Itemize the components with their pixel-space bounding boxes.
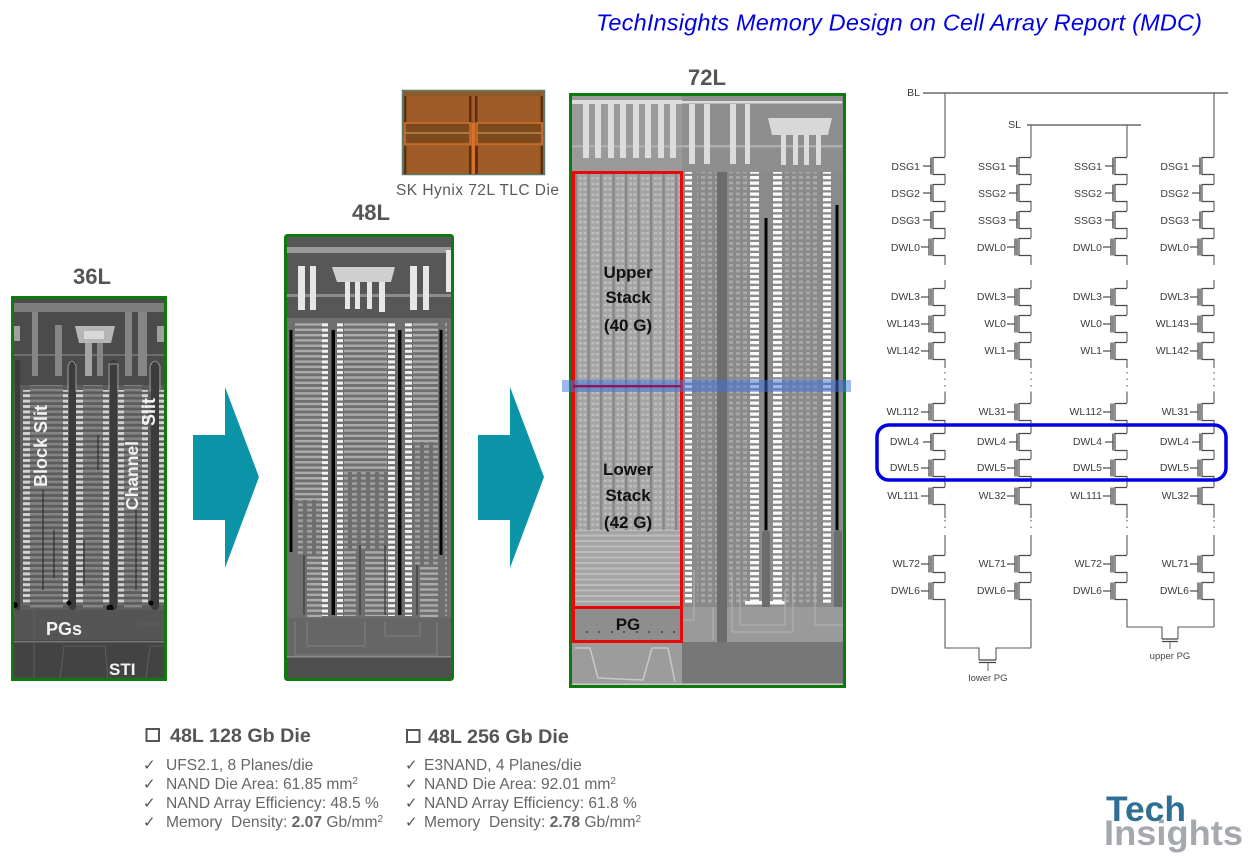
label: Upper Stack: Upper (603, 263, 653, 282)
SL line: SL (1008, 119, 1021, 131)
string 1: DSG3 (891, 215, 920, 227)
blue highlight box (877, 425, 1226, 480)
string 4: DWL6 (1160, 585, 1189, 597)
text block: 48L 256 Gb Die: NAND Array Efficiency: 61.8 % (424, 795, 637, 812)
string 3: SSG1 (1074, 161, 1102, 173)
string 1: WL142 (887, 345, 920, 357)
panel: 36L cross-section (12, 297, 166, 680)
BL line: BL (907, 87, 920, 99)
string 3: WL111 (1070, 490, 1102, 502)
text block: 48L 128 Gb Die: 2 (352, 776, 358, 787)
red box: stack (574, 172, 682, 608)
heading: 48L: 48L (352, 200, 390, 225)
die caption: SK Hynix 72L TLC Die (396, 182, 559, 199)
string 4: DWL3 (1160, 291, 1189, 303)
arrow: 36L to 48L (193, 387, 259, 568)
label: STI: STI (109, 660, 135, 679)
label: Lower Stack: Lower (603, 460, 653, 479)
string 1: WL111 (887, 490, 919, 502)
label: PG: PG (616, 615, 640, 634)
text block: 48L 256 Gb Die: 48L 256 Gb Die (428, 726, 569, 748)
string 2: DWL5 (977, 462, 1006, 474)
string 4: DWL4 (1160, 436, 1189, 448)
label: Upper Stack: Stack (605, 288, 651, 307)
string 2: SSG1 (978, 161, 1006, 173)
string 4: WL143 (1156, 318, 1189, 330)
text block: 48L 256 Gb Die: ✓ (405, 776, 418, 793)
string 2: SSG2 (978, 188, 1006, 200)
text block: 48L 128 Gb Die: 48L 128 Gb Die (170, 725, 311, 747)
label: Lower Stack: (42 G) (604, 513, 652, 532)
string 1: DWL5 (890, 462, 919, 474)
text block: 48L 256 Gb Die: ✓ (405, 757, 418, 774)
string 4: WL142 (1156, 345, 1189, 357)
heading: 72L: 72L (688, 65, 726, 90)
string 4: DSG2 (1160, 188, 1189, 200)
text block: 48L 256 Gb Die: E3NAND, 4 Planes/die (424, 757, 582, 774)
string 2: DWL4 (977, 436, 1006, 448)
string 1: WL72 (893, 558, 920, 570)
string 2 (977, 125, 1031, 648)
string 2: DWL6 (977, 585, 1006, 597)
string 3: WL1 (1080, 345, 1102, 357)
string 4: WL71 (1162, 558, 1189, 570)
text block: 48L 128 Gb Die: NAND Die Area: 61.85 mm (166, 776, 352, 793)
string 1: DWL0 (891, 242, 920, 254)
text block: 48L 128 Gb Die (143, 725, 383, 831)
logo: TechInsights (1104, 790, 1243, 853)
text block: 48L 256 Gb Die (405, 726, 641, 831)
text block: 48L 128 Gb Die: ✓ (143, 757, 156, 774)
string 4 (1156, 93, 1214, 627)
string 4: DWL0 (1160, 242, 1189, 254)
string 3: DWL5 (1073, 462, 1102, 474)
label: Upper Stack: (40 G) (604, 316, 652, 335)
string 2: WL71 (979, 558, 1006, 570)
text block: 48L 256 Gb Die: ✓ (405, 814, 418, 831)
string 1 (886, 93, 1031, 660)
string 3: SSG3 (1074, 215, 1102, 227)
string 2: WL1 (984, 345, 1006, 357)
string 4: WL32 (1162, 490, 1189, 502)
text block: 48L 256 Gb Die: 2 (635, 814, 641, 825)
text block: 48L 256 Gb Die: ✓ (405, 795, 418, 812)
string 1: DWL6 (891, 585, 920, 597)
red box: PG (574, 608, 682, 642)
string 4: DSG1 (1160, 161, 1189, 173)
string 2: WL0 (984, 318, 1006, 330)
string 3: WL0 (1080, 318, 1102, 330)
title: TechInsights Memory Design on Cell Array Report (MDC) (596, 10, 1202, 36)
string 1: WL112 (886, 406, 919, 418)
string 4: DWL5 (1160, 462, 1189, 474)
string 3: DWL0 (1073, 242, 1102, 254)
logo: TechInsights: Tech (1106, 790, 1186, 829)
text block: 48L 256 Gb Die: 2 (610, 776, 616, 787)
upper PG (1150, 639, 1190, 662)
text block: 48L 128 Gb Die: Memory Density: 2.07 Gb/mm (166, 814, 377, 831)
circuit schematic (877, 87, 1228, 684)
label: Block Slit: Block Slit (31, 405, 51, 487)
label: Channel: Channel (122, 441, 142, 510)
string 1: WL143 (887, 318, 920, 330)
string 2: SSG3 (978, 215, 1006, 227)
string 3: WL112 (1070, 406, 1102, 418)
text block: 48L 256 Gb Die: Memory Density: 2.78 Gb/mm (424, 814, 635, 831)
string 2: WL31 (979, 406, 1006, 418)
string 3: DWL4 (1073, 436, 1102, 448)
string 3: DWL6 (1073, 585, 1102, 597)
heading: 36L: 36L (73, 264, 111, 289)
string 1: DWL4 (890, 436, 919, 448)
arrow: 48L to 72L (478, 387, 544, 568)
lower PG (968, 660, 1008, 684)
string 2: WL32 (979, 490, 1006, 502)
string 3 (1070, 125, 1214, 639)
string 2: DWL0 (977, 242, 1006, 254)
label: PGs: PGs (46, 619, 82, 639)
label: Slit: Slit (139, 398, 159, 426)
upper PG: upper PG (1150, 651, 1190, 662)
text block: 48L 128 Gb Die: ✓ (143, 814, 156, 831)
string 4: WL31 (1162, 406, 1189, 418)
string 3: DWL3 (1073, 291, 1102, 303)
text block: 48L 128 Gb Die: UFS2.1, 8 Planes/die (166, 757, 313, 774)
string 4: DSG3 (1160, 215, 1189, 227)
string 3: WL72 (1075, 558, 1102, 570)
panel: 72L cross-section (562, 94, 851, 687)
panel: 48L cross-section (285, 235, 453, 680)
text block: 48L 256 Gb Die: NAND Die Area: 92.01 mm (424, 776, 610, 793)
text block: 48L 128 Gb Die: 2 (377, 814, 383, 825)
logo: TechInsights: Insights (1104, 814, 1243, 853)
string 1: DSG1 (891, 161, 920, 173)
SL line (1008, 119, 1141, 131)
blue joint band (562, 380, 851, 392)
text block: 48L 128 Gb Die: NAND Array Efficiency: 48.5 % (166, 795, 379, 812)
string 1: DWL3 (891, 291, 920, 303)
die photo (402, 90, 544, 174)
text block: 48L 128 Gb Die: ✓ (143, 776, 156, 793)
string 2: DWL3 (977, 291, 1006, 303)
label: Lower Stack: Stack (605, 486, 651, 505)
string 1: DSG2 (891, 188, 920, 200)
lower PG: lower PG (968, 673, 1008, 684)
text block: 48L 128 Gb Die: ✓ (143, 795, 156, 812)
string 3: SSG2 (1074, 188, 1102, 200)
